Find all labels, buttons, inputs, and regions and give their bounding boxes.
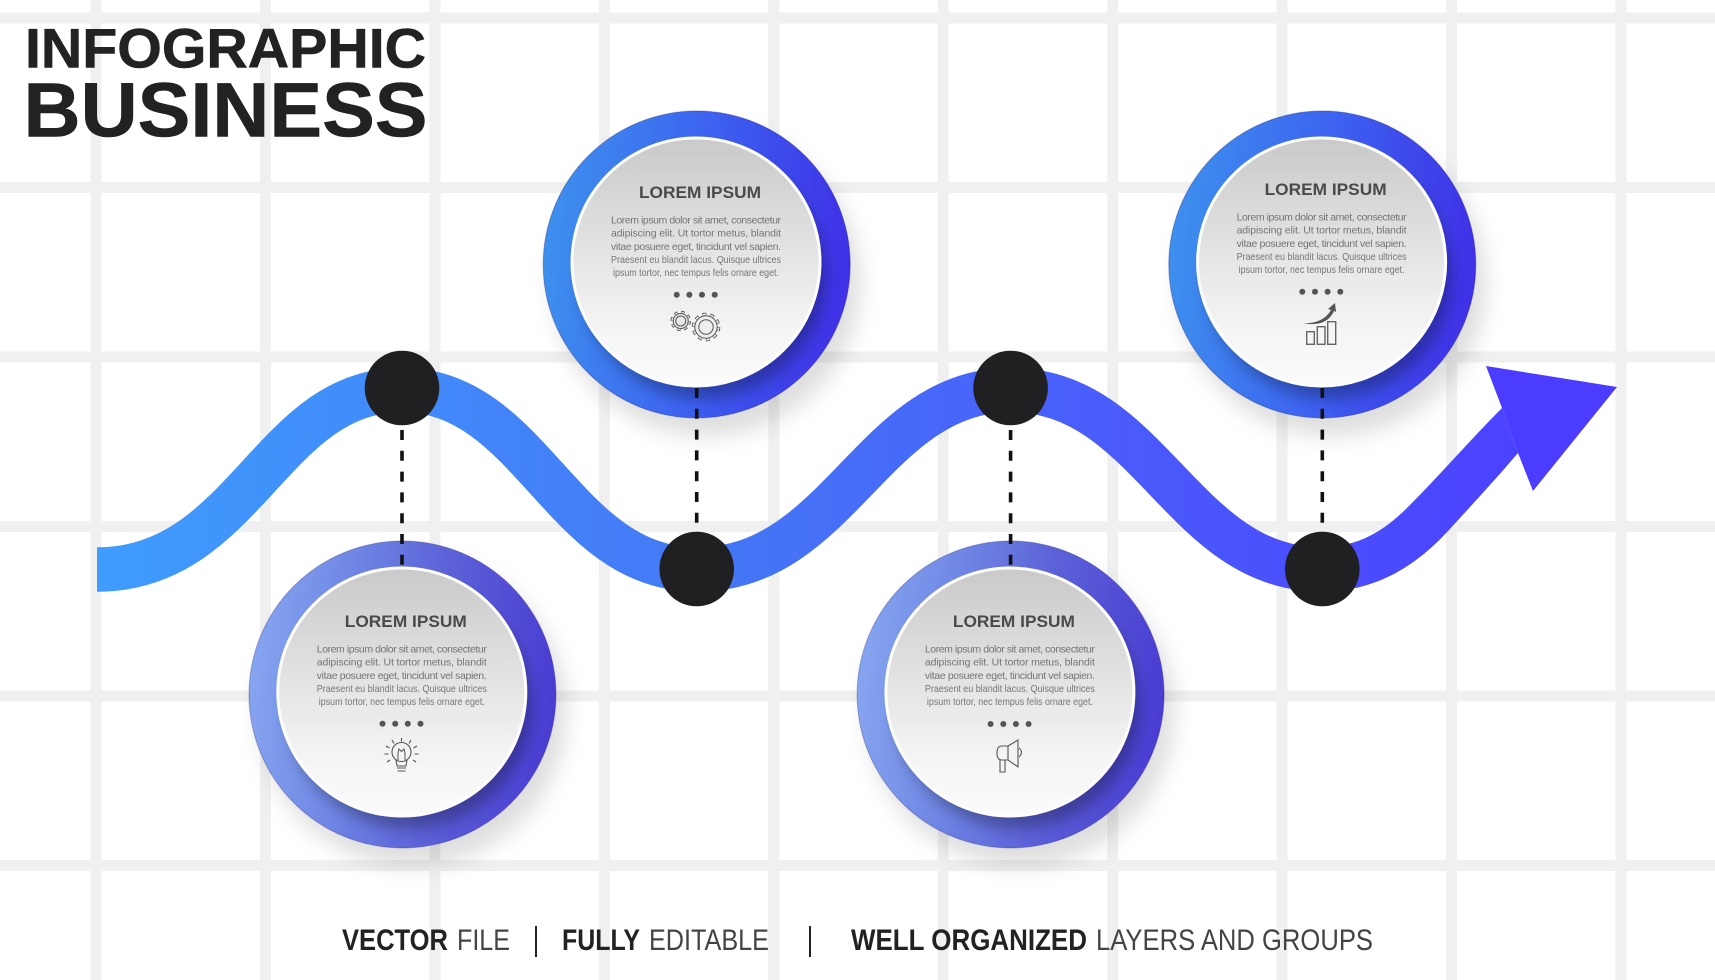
text block: step 3 — [925, 613, 1095, 727]
icon: megaphone — [997, 740, 1022, 772]
text block: step 1: vitae posuere eget, tincidunt vel sapien. — [317, 670, 487, 682]
wave arrow — [97, 366, 1617, 592]
text block: step 4 — [1237, 181, 1407, 295]
text block: step 3: Lorem ipsum dolor sit amet, consectetur — [925, 644, 1095, 656]
panel: step 4 — [1169, 111, 1476, 418]
text block: step 2: vitae posuere eget, tincidunt vel sapien. — [611, 241, 781, 253]
footer caption: FULLY — [562, 924, 640, 957]
text block: step 4: adipiscing elit. Ut tortor metus, blandit — [1237, 225, 1407, 237]
text block: step 2: LOREM IPSUM — [639, 184, 761, 202]
panel: step 3 — [857, 541, 1164, 848]
text block: step 4: ipsum tortor, nec tempus felis ornare eget. — [1239, 264, 1405, 276]
text block: step 1: Praesent eu blandit lacus. Quisque ultrices — [317, 683, 487, 695]
footer caption: VECTOR — [342, 924, 448, 957]
text block: step 1: LOREM IPSUM — [345, 613, 467, 631]
text block: step 2: Lorem ipsum dolor sit amet, consectetur — [611, 215, 782, 227]
text block: step 2: ipsum tortor, nec tempus felis ornare eget. — [613, 267, 779, 279]
text block: step 4: Praesent eu blandit lacus. Quisque ultrices — [1237, 251, 1407, 263]
icon: growth chart — [1304, 303, 1336, 344]
text block: step 1: adipiscing elit. Ut tortor metus, blandit — [317, 657, 487, 669]
text block: step 1 — [317, 613, 487, 727]
text block: step 1: ipsum tortor, nec tempus felis ornare eget. — [319, 696, 485, 708]
text block: step 2 — [611, 184, 782, 298]
panel: step 1 — [249, 541, 556, 848]
footer caption: LAYERS AND GROUPS — [1096, 924, 1373, 957]
text block: step 4: vitae posuere eget, tincidunt vel sapien. — [1237, 238, 1407, 250]
title: BUSINESS — [24, 68, 428, 154]
footer caption — [342, 924, 1373, 957]
footer caption: EDITABLE — [649, 924, 769, 957]
title: INFOGRAPHIC — [25, 16, 426, 80]
text block: step 4: Lorem ipsum dolor sit amet, consectetur — [1237, 212, 1407, 224]
text block: step 4: LOREM IPSUM — [1265, 181, 1387, 199]
text block: step 3: adipiscing elit. Ut tortor metus, blandit — [925, 657, 1095, 669]
panel: step 2 — [543, 111, 850, 418]
text block: step 3: Praesent eu blandit lacus. Quisque ultrices — [925, 683, 1095, 695]
node dots — [365, 351, 1360, 606]
icon: light bulb — [384, 738, 418, 771]
text block: step 2: Praesent eu blandit lacus. Quisque ultrices — [611, 254, 781, 266]
footer caption: FILE — [457, 924, 510, 957]
icon: gears — [672, 312, 718, 340]
footer caption: WELL ORGANIZED — [851, 924, 1087, 957]
text block: step 2: adipiscing elit. Ut tortor metus, blandit — [611, 228, 781, 240]
connector lines — [402, 388, 1322, 567]
text block: step 1: Lorem ipsum dolor sit amet, consectetur — [317, 644, 487, 656]
title — [24, 16, 428, 154]
text block: step 3: vitae posuere eget, tincidunt vel sapien. — [925, 670, 1095, 682]
text block: step 3: ipsum tortor, nec tempus felis ornare eget. — [927, 696, 1093, 708]
text block: step 3: LOREM IPSUM — [953, 613, 1075, 631]
